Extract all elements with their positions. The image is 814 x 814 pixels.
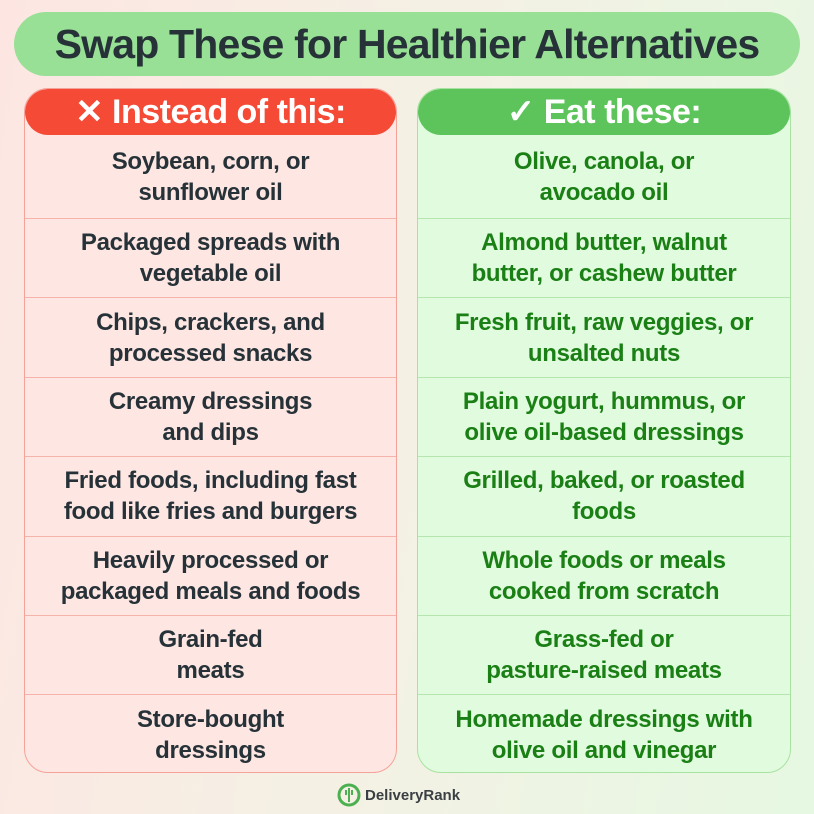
panel: eat these: olive oil-based dressings	[464, 419, 744, 446]
panel: eat these: olive oil and vinegar	[492, 737, 716, 764]
title: Swap These for Healthier Alternatives	[55, 21, 759, 67]
panel: eat these: avocado oil	[540, 178, 668, 206]
panel: eat these: ✓ Eat these:	[507, 93, 701, 131]
panel: instead of this: Grain-fed	[158, 626, 262, 653]
panel: eat these	[417, 88, 791, 773]
panel: eat these: Grilled, baked, or roasted	[463, 467, 745, 494]
panel: instead of this: Store-bought	[137, 706, 284, 733]
panel: eat these: Almond butter, walnut	[481, 229, 727, 256]
panel: instead of this: meats	[177, 657, 244, 684]
panel: eat these: Olive, canola, or	[514, 148, 694, 174]
panel: eat these: cooked from scratch	[489, 578, 719, 605]
panel: eat these: Fresh fruit, raw veggies, or	[455, 309, 753, 336]
panel: instead of this: Creamy dressings	[109, 388, 312, 415]
panel: eat these: butter, or cashew butter	[472, 260, 736, 287]
title	[14, 12, 800, 76]
panel: instead of this	[24, 88, 397, 773]
panel: eat these: Homemade dressings with	[455, 706, 753, 733]
panel: instead of this: Chips, crackers, and	[96, 309, 325, 336]
panel: instead of this: dressings	[155, 737, 266, 764]
panel: instead of this: Packaged spreads with	[81, 229, 340, 256]
panel: instead of this: Fried foods, including fast	[65, 467, 356, 494]
panel: eat these: unsalted nuts	[528, 340, 680, 367]
panel: instead of this: food like fries and burgers	[64, 498, 357, 525]
logo: DeliveryRank	[365, 786, 460, 804]
panel: instead of this: Heavily processed or	[93, 547, 328, 574]
panel: instead of this: processed snacks	[109, 340, 312, 367]
panel: eat these: foods	[572, 498, 636, 525]
panel: instead of this: and dips	[162, 419, 259, 446]
panel: instead of this: sunflower oil	[138, 178, 283, 206]
panel: eat these: Whole foods or meals	[482, 547, 726, 574]
panel: eat these: pasture-raised meats	[486, 657, 722, 684]
panel: instead of this: ✕ Instead of this:	[75, 93, 346, 131]
logo	[338, 784, 460, 806]
panel: eat these: Plain yogurt, hummus, or	[463, 388, 745, 415]
panel: instead of this: Soybean, corn, or	[112, 148, 309, 174]
panel: instead of this: vegetable oil	[140, 260, 281, 287]
panel: instead of this: packaged meals and foods	[61, 578, 360, 605]
panel: eat these: Grass-fed or	[534, 626, 674, 653]
